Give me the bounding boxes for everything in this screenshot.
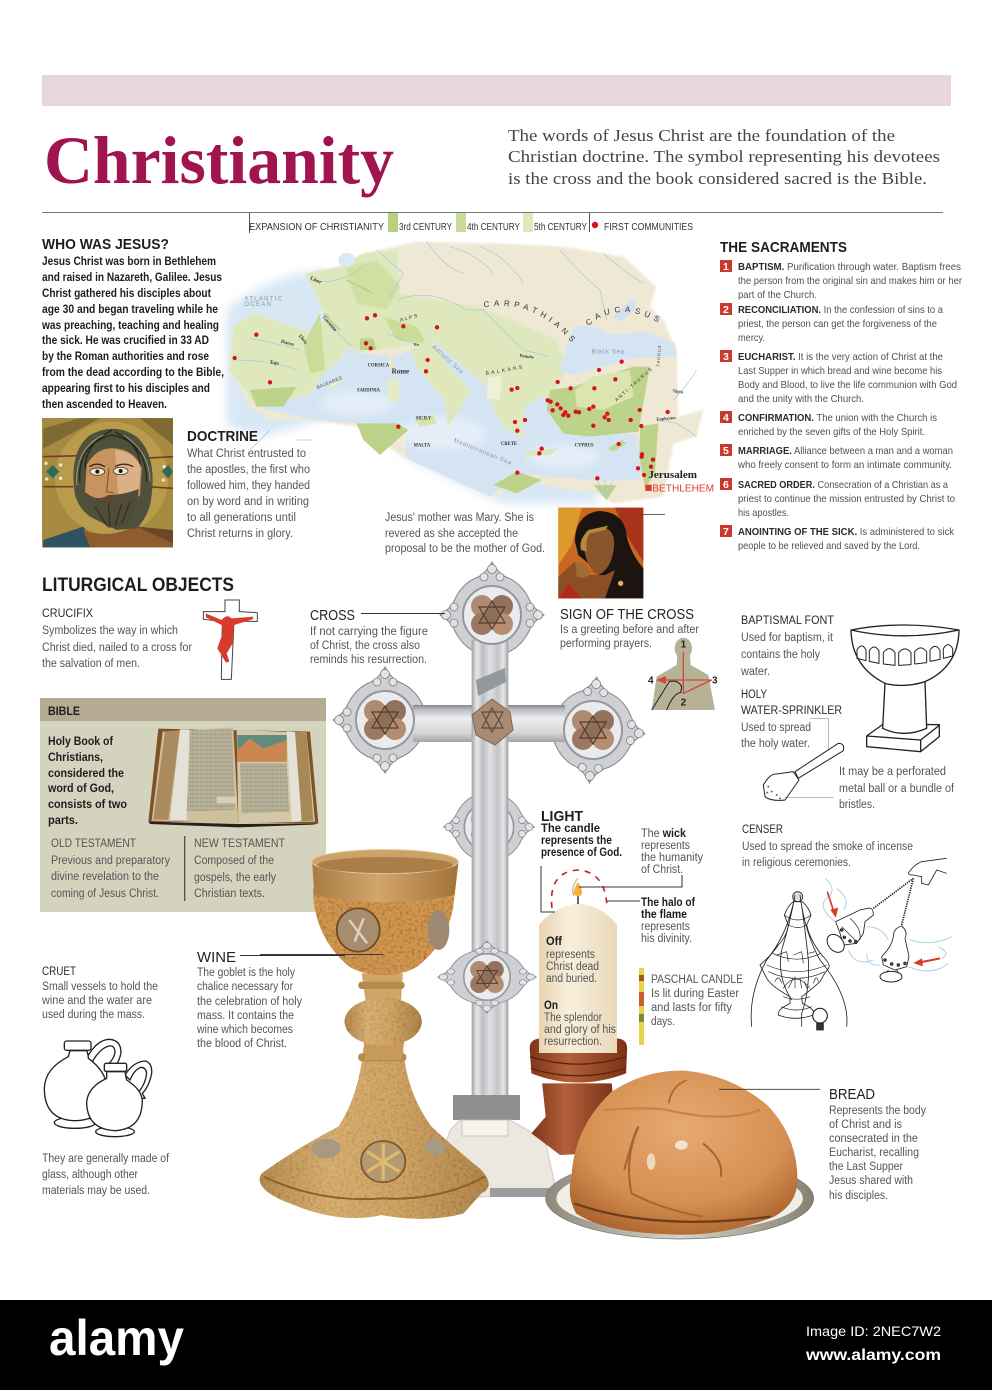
map of the expansion of Christianity: ATLANTIC <box>244 296 283 302</box>
sacraments list: his apostles. <box>738 507 789 519</box>
light text: his divinity. <box>641 933 692 945</box>
who was Jesus text block: age 30 and began traveling while he <box>42 304 218 316</box>
bible panel: coming of Jesus Christ. <box>51 888 159 900</box>
light text: LIGHT <box>541 808 583 825</box>
baptismal font and sprinkler text: HOLY <box>741 689 767 701</box>
Mary text: revered as she accepted the <box>385 528 518 540</box>
map of the expansion of Christianity: Black Sea <box>592 349 625 355</box>
paschal candle: and lasts for fifty <box>651 1002 732 1014</box>
baptismal font and sprinkler text: It may be a perforated <box>839 766 946 778</box>
sacraments list: 2 <box>723 304 729 316</box>
who was Jesus text block: Christ gathered his disciples about <box>42 288 211 300</box>
wine text: the blood of Christ. <box>197 1038 287 1050</box>
icon: baptismal font and holy water sprinkler <box>763 625 959 800</box>
light text: of Christ. <box>641 864 683 876</box>
bread text: Jesus shared with <box>829 1175 913 1187</box>
candle with flame and halo: represents <box>546 949 595 961</box>
sacraments list: Body and Blood, to live the life communion with God <box>738 379 957 391</box>
crucifix text <box>42 608 192 670</box>
cruet text: wine and the water are <box>41 995 152 1007</box>
doctrine text block: Christ returns in glory. <box>187 528 293 540</box>
paschal candle <box>639 968 743 1045</box>
light text: the humanity <box>641 852 703 864</box>
sacraments list: 4 <box>723 412 729 424</box>
map of the expansion of Christianity: Danube <box>519 353 534 360</box>
bible panel: word of God, <box>47 783 114 795</box>
censer text: CENSER <box>742 824 783 836</box>
icon: sign of the cross diagram: 4 <box>648 675 654 686</box>
cruet text: Small vessels to hold the <box>42 981 158 993</box>
bible panel: gospels, the early <box>194 872 276 884</box>
censer text: in religious ceremonies. <box>742 857 851 869</box>
chalice photo <box>260 850 489 1219</box>
sacraments list: CONFIRMATION. The union with the Church is <box>738 412 937 424</box>
sign of the cross text: SIGN OF THE CROSS <box>560 606 694 623</box>
Mary text: Jesus' mother was Mary. She is <box>385 512 534 524</box>
bottom black credit bar: www.alamy.com <box>805 1347 941 1364</box>
sacraments list: SACRED ORDER. Consecration of a Christian as a <box>738 479 948 491</box>
sacraments list: and the unity with the Church. <box>738 393 864 405</box>
candle with flame and halo: resurrection. <box>544 1036 602 1048</box>
paschal candle: days. <box>651 1016 675 1028</box>
baptismal font and sprinkler text: Used to spread <box>741 722 811 734</box>
bible panel: BIBLE <box>48 706 80 718</box>
candle holder behind bread <box>530 1038 627 1155</box>
who was Jesus text block: then ascended to Heaven. <box>42 399 167 411</box>
Mary text: proposal to be the mother of God. <box>385 543 545 555</box>
bread text: Represents the body <box>829 1105 926 1117</box>
baptismal font and sprinkler text: BAPTISMAL FONT <box>741 615 834 627</box>
photo: open Bible <box>148 727 318 827</box>
wine text: WINE <box>197 949 236 966</box>
sacraments list: who freely consent to form an intimate community. <box>737 459 952 471</box>
who was Jesus text block: appearing first to his disciples and <box>42 383 210 395</box>
map of the expansion of Christianity: Ebro <box>297 334 308 346</box>
map of the expansion of Christianity: BALEARES <box>316 375 343 390</box>
intro paragraph: Christian doctrine. The symbol representing his devotees <box>508 147 940 166</box>
map of the expansion of Christianity: ANTI-TAURUS <box>614 366 654 402</box>
map of the expansion of Christianity: Duero <box>280 340 295 348</box>
cross label text: of Christ, the cross also <box>310 640 420 652</box>
candle with flame and halo: and glory of his <box>544 1024 616 1036</box>
who was Jesus text block: the sick. He was crucified in 33 AD <box>42 335 209 347</box>
who was Jesus text block: and raised in Nazareth, Galilee. Jesus <box>42 272 222 284</box>
sacraments list: MARRIAGE. Alliance between a man and a woman <box>738 445 953 457</box>
bible panel: Christians, <box>48 752 103 764</box>
doctrine text block: DOCTRINE <box>187 428 258 445</box>
map legend: 5th CENTURY <box>534 222 587 233</box>
bible panel: considered the <box>48 768 124 780</box>
sacraments list: THE SACRAMENTS <box>720 239 847 256</box>
sacraments list: enriched by the seven gifts of the Holy Spirit. <box>738 426 925 438</box>
bible panel: divine revelation to the <box>51 871 159 883</box>
light text: The candle <box>541 823 600 835</box>
sacraments list: part of the Church. <box>738 289 817 301</box>
sacraments list: 6 <box>723 479 729 491</box>
baptismal font and sprinkler text: the holy water. <box>741 738 810 750</box>
cruet text: materials may be used. <box>42 1185 150 1197</box>
sacraments list: people to be relieved and saved by the Lord. <box>738 540 920 552</box>
map of the expansion of Christianity: Rome <box>392 368 409 376</box>
cross label text: If not carrying the figure <box>310 626 428 638</box>
map of the expansion of Christianity <box>223 240 714 543</box>
bible panel: Christian texts. <box>194 888 265 900</box>
sign of the cross text: performing prayers. <box>560 638 652 650</box>
cross label text: CROSS <box>310 607 355 624</box>
bible panel: Holy Book of <box>48 736 113 748</box>
wine text: mass. It contains the <box>197 1010 294 1022</box>
bread text: Eucharist, recalling <box>829 1147 919 1159</box>
candle with flame and halo: The splendor <box>544 1012 602 1024</box>
sacraments list: RECONCILIATION. In the confession of sins to a <box>738 304 943 316</box>
cruet text: They are generally made of <box>42 1153 170 1165</box>
who was Jesus text block: from the dead according to the Bible, <box>42 367 224 379</box>
map of the expansion of Christianity: CORSICA <box>368 364 390 369</box>
bread text: his disciples. <box>829 1190 888 1202</box>
sacraments list: 7 <box>723 526 729 538</box>
map legend: EXPANSION OF CHRISTIANITY <box>249 222 384 233</box>
sacraments list: BAPTISM. Purification through water. Baptism frees <box>738 261 961 273</box>
sacraments list: ANOINTING OF THE SICK. Is administered to sick <box>738 526 955 538</box>
map of the expansion of Christianity: Adriatic Sea <box>430 344 464 376</box>
candle with flame and halo: and buried. <box>546 973 597 985</box>
map legend: 4th CENTURY <box>467 222 520 233</box>
baptismal font and sprinkler text: contains the holy <box>741 649 820 661</box>
wine text <box>196 949 302 1050</box>
crucifix text: the salvation of men. <box>42 658 140 670</box>
bible panel: consists of two <box>48 799 127 811</box>
map of the expansion of Christianity: Tigris <box>672 388 684 395</box>
doctrine text block: What Christ entrusted to <box>187 448 306 460</box>
cruet text: glass, although other <box>42 1169 138 1181</box>
sign of the cross text <box>560 606 699 650</box>
map of the expansion of Christianity: Mediterranean Sea <box>453 438 513 467</box>
icon: sign of the cross diagram <box>648 638 718 710</box>
crucifix text: Symbolizes the way in which <box>42 625 178 637</box>
wine text: wine which becomes <box>196 1024 293 1036</box>
sacraments list: priest, the person can get the forgiveness of the <box>738 318 937 330</box>
candle with flame and halo <box>539 866 682 1053</box>
light text: The halo of <box>641 897 695 909</box>
who was Jesus text block: WHO WAS JESUS? <box>42 236 169 253</box>
bread text: the Last Supper <box>829 1161 903 1173</box>
map legend <box>249 213 693 233</box>
bread text: BREAD <box>829 1086 875 1103</box>
cruet text: used during the mass. <box>42 1009 145 1021</box>
icon: crucifix <box>203 600 257 679</box>
icon: sign of the cross diagram: 2 <box>681 697 687 708</box>
who was Jesus text block: Jesus Christ was born in Bethlehem <box>42 256 216 268</box>
map legend: FIRST COMMUNITIES <box>604 222 693 233</box>
light text: The wick <box>641 828 687 840</box>
sacraments list <box>720 239 962 552</box>
liturgical objects heading: LITURGICAL OBJECTS <box>42 575 234 596</box>
map of the expansion of Christianity: SICILY <box>416 416 432 421</box>
silver processional cross <box>333 562 649 1197</box>
icon: sign of the cross diagram: 3 <box>712 675 718 686</box>
baptismal font and sprinkler text: metal ball or a bundle of <box>839 783 955 795</box>
light text: represents <box>641 840 690 852</box>
bottom black credit bar <box>0 1300 992 1390</box>
map of the expansion of Christianity: TAURUS <box>655 344 662 367</box>
map of the expansion of Christianity: BETHLEHEM <box>652 484 714 495</box>
map of the expansion of Christianity: CAUCASUS <box>586 306 660 325</box>
doctrine text block: to all generations until <box>187 512 296 524</box>
crucifix text: Christ died, nailed to a cross for <box>42 642 192 654</box>
who was Jesus text block: was preaching, teaching and healing <box>41 320 219 332</box>
bread text: consecrated in the <box>829 1133 918 1145</box>
sacraments list: Last Supper in which bread and wine become his <box>738 365 942 377</box>
map of the expansion of Christianity: SARDINIA <box>357 389 381 394</box>
sacraments list: 1 <box>723 261 729 273</box>
light text <box>541 808 703 945</box>
baptismal font and sprinkler text: Used for baptism, it <box>741 632 834 644</box>
map of the expansion of Christianity: Garonne <box>321 315 338 334</box>
bible panel: Composed of the <box>194 855 274 867</box>
who was Jesus text block: by the Roman authorities and rose <box>42 351 209 363</box>
light text: represents <box>641 921 690 933</box>
sign of the cross text: Is a greeting before and after <box>560 624 699 636</box>
bottom black credit bar: alamy <box>49 1310 184 1366</box>
map of the expansion of Christianity: MALTA <box>414 443 431 448</box>
wine text: The goblet is the holy <box>197 967 295 979</box>
cruet text: CRUET <box>42 966 76 978</box>
light text: the flame <box>641 909 687 921</box>
baptismal font and sprinkler text: bristles. <box>839 799 875 811</box>
sacraments list: 5 <box>723 445 729 457</box>
portrait of Jesus mosaic <box>42 418 173 547</box>
intro paragraph: is the cross and the book considered sacred is the Bible. <box>508 169 927 188</box>
wine leader line <box>240 955 345 956</box>
candle with flame and halo: Christ dead <box>546 961 599 973</box>
map of the expansion of Christianity: ALPS <box>399 313 420 324</box>
candle with flame and halo: Off <box>546 936 562 948</box>
doctrine text block: the apostles, the first who <box>187 464 310 476</box>
icon: censers with smoke <box>751 858 952 1030</box>
paschal candle: PASCHAL CANDLE <box>651 974 743 986</box>
doctrine text block: on by word and in writing <box>187 496 309 508</box>
intro paragraph: The words of Jesus Christ are the foundation of the <box>508 126 895 145</box>
map of the expansion of Christianity: CRETE <box>501 442 517 447</box>
doctrine text block <box>187 428 310 540</box>
map of the expansion of Christianity: CARPATHIANS <box>484 300 575 342</box>
baptismal font and sprinkler text <box>740 615 955 811</box>
baptismal font and sprinkler text: WATER-SPRINKLER <box>741 705 842 717</box>
bible panel <box>40 698 326 912</box>
map of the expansion of Christianity: CYPRUS <box>575 444 594 449</box>
title: Christianity <box>44 122 394 198</box>
map of the expansion of Christianity: OCEAN <box>244 302 272 308</box>
bottom black credit bar: Image ID: 2NEC7W2 <box>806 1323 941 1339</box>
bible panel: OLD TESTAMENT <box>51 838 136 850</box>
wine text: the celebration of holy <box>197 996 302 1008</box>
sacraments list: EUCHARIST. It is the very action of Christ at the <box>738 351 943 363</box>
censer text <box>742 824 913 869</box>
cross label text <box>310 607 428 666</box>
sacraments list: 3 <box>723 351 729 363</box>
censer text: Used to spread the smoke of incense <box>742 841 913 853</box>
top pink bar <box>42 75 951 106</box>
crucifix text: CRUCIFIX <box>42 608 93 620</box>
cross label text: reminds his resurrection. <box>310 654 427 666</box>
who was Jesus text block <box>41 236 224 411</box>
light text: represents the <box>541 835 612 847</box>
map of the expansion of Christianity: Euphrates <box>656 415 676 422</box>
light text: presence of God. <box>541 847 622 859</box>
cruet text <box>41 966 170 1197</box>
Mary text <box>385 512 545 555</box>
bread text: of Christ and is <box>829 1119 902 1131</box>
bible panel: NEW TESTAMENT <box>194 838 285 850</box>
sacraments list: mercy. <box>738 332 765 344</box>
map of the expansion of Christianity: Jerusalem <box>648 470 698 481</box>
bread on silver plate <box>546 1071 820 1239</box>
map of the expansion of Christianity: Liser <box>309 275 323 286</box>
candle with flame and halo: On <box>544 1000 558 1012</box>
doctrine text block: followed him, they handed <box>187 480 310 492</box>
bread text <box>829 1086 926 1202</box>
bible panel: parts. <box>48 815 78 827</box>
sacraments list: the person from the original sin and makes him or her <box>738 275 962 287</box>
intro paragraph <box>508 126 940 188</box>
sacraments list: priest to continue the mission entrusted by Christ to <box>738 493 955 505</box>
map legend: 3rd CENTURY <box>399 222 452 233</box>
icon: sign of the cross diagram: 1 <box>681 639 687 650</box>
paschal candle: Is lit during Easter <box>651 988 739 1000</box>
baptismal font and sprinkler text: water. <box>740 666 770 678</box>
map of the expansion of Christianity: Po <box>414 342 419 347</box>
icon of Mary <box>558 508 665 598</box>
icon: two cruets <box>44 1039 152 1137</box>
bible panel: Previous and preparatory <box>51 855 170 867</box>
map of the expansion of Christianity: Tajo <box>269 360 280 367</box>
wine text: chalice necessary for <box>197 981 293 993</box>
map of the expansion of Christianity: BALKANS <box>485 364 525 377</box>
